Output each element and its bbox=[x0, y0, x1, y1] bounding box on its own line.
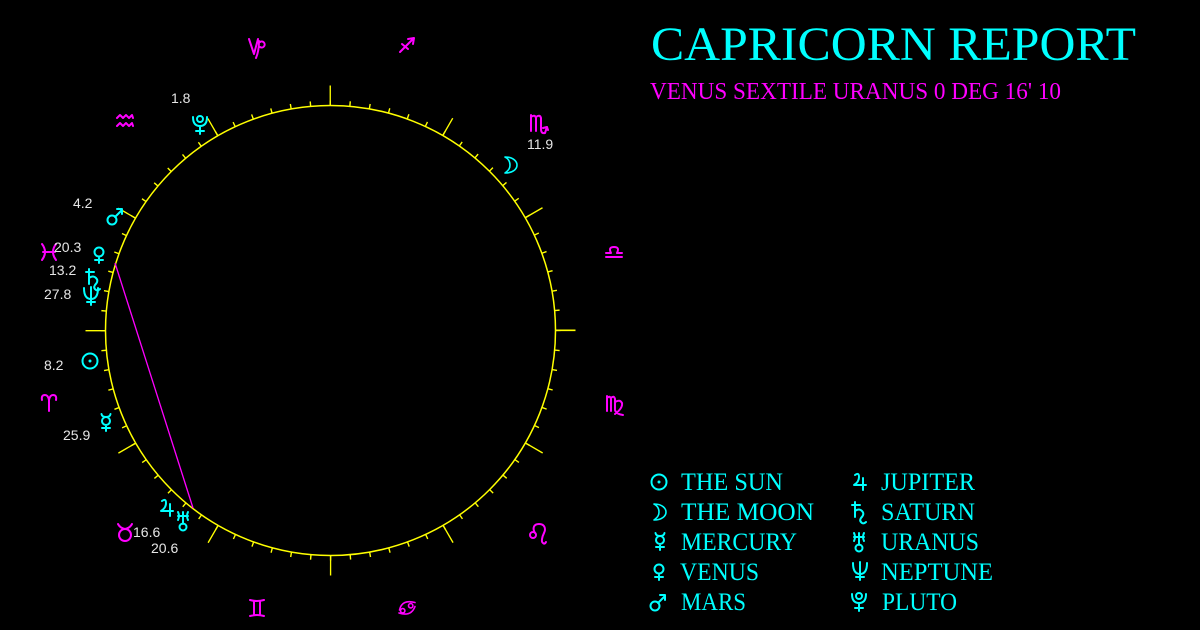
chart wheel bbox=[96, 96, 566, 566]
legend: Neptune: NEPTUNE bbox=[881, 559, 993, 586]
sign: Virgo bbox=[607, 396, 623, 415]
legend: Mercury: MERCURY bbox=[681, 529, 797, 556]
planet: Neptune bbox=[84, 287, 98, 305]
sign: Aries bbox=[42, 395, 56, 411]
title: CAPRICORN REPORT bbox=[651, 18, 1136, 71]
degree: Mars: 4.2 bbox=[73, 195, 93, 211]
sign: Pisces bbox=[42, 244, 56, 260]
planet: Saturn bbox=[86, 269, 100, 290]
sign: Gemini bbox=[250, 600, 264, 616]
legend: Uranus: URANUS bbox=[881, 529, 979, 556]
planet: Venus bbox=[94, 248, 104, 263]
degree: Sun: 8.2 bbox=[44, 357, 64, 373]
planet: Mercury bbox=[102, 414, 110, 431]
planet: Uranus bbox=[178, 512, 188, 530]
legend: The Sun: THE SUN bbox=[681, 469, 783, 496]
degree: Moon: 11.9 bbox=[527, 136, 553, 152]
legend: Pluto bbox=[852, 589, 957, 616]
legend: Saturn: SATURN bbox=[881, 499, 975, 526]
zodiac signs bbox=[42, 38, 623, 616]
legend: Mars: MARS bbox=[681, 589, 746, 616]
legend: Mars bbox=[650, 589, 746, 616]
degree: Saturn: 13.2 bbox=[49, 262, 76, 278]
sign: Scorpio bbox=[531, 115, 548, 133]
sign: Taurus bbox=[118, 524, 132, 541]
sign: Libra bbox=[606, 247, 622, 257]
planet: Sun bbox=[82, 354, 98, 368]
degree: Venus: 20.3 bbox=[54, 239, 81, 255]
legend bbox=[650, 469, 993, 616]
subtitle: VENUS SEXTILE URANUS 0 DEG 16' 10 bbox=[650, 79, 1061, 105]
degree: Jupiter: 16.6 bbox=[133, 524, 160, 540]
legend: Pluto: PLUTO bbox=[882, 589, 957, 616]
sign: Cancer bbox=[399, 602, 415, 614]
legend: Venus: VENUS bbox=[680, 559, 759, 586]
degree labels bbox=[44, 90, 553, 556]
planet: Moon bbox=[505, 157, 517, 173]
degree: Neptune: 27.8 bbox=[44, 286, 71, 302]
sign: Sagittarius bbox=[400, 38, 414, 52]
planet: Mars bbox=[108, 209, 122, 224]
degree: Uranus: 20.6 bbox=[151, 540, 178, 556]
planet: Pluto bbox=[193, 116, 207, 134]
sign: Capricorn bbox=[249, 39, 265, 58]
legend: The Moon: THE MOON bbox=[681, 499, 814, 526]
planets on the wheel bbox=[82, 116, 517, 530]
legend: Jupiter: JUPITER bbox=[881, 469, 975, 496]
sign: Aquarius bbox=[117, 115, 133, 126]
sign: Leo bbox=[530, 524, 546, 544]
degree: Pluto: 1.8 bbox=[171, 90, 191, 106]
aspect line: Venus sextile Uranus bbox=[115, 263, 193, 508]
degree: Mercury: 25.9 bbox=[63, 427, 90, 443]
planet: Jupiter bbox=[161, 500, 173, 516]
